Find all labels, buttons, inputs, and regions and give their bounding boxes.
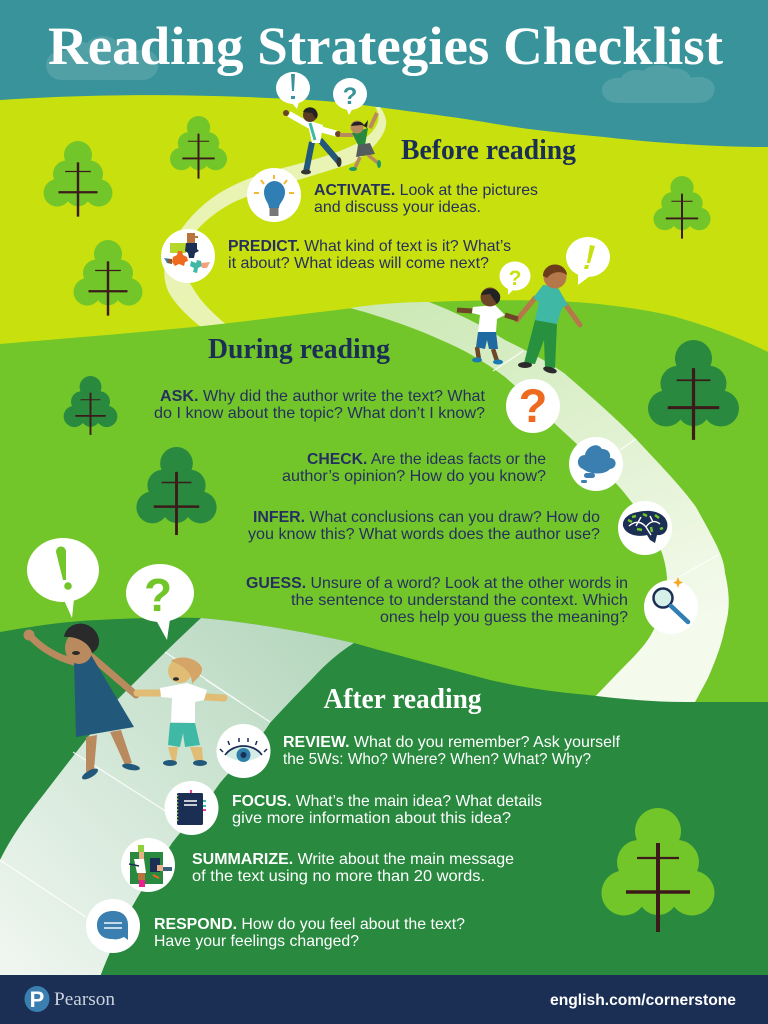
title: Reading Strategies Checklist	[48, 16, 723, 76]
trees	[44, 116, 739, 932]
path: during reading	[350, 302, 729, 704]
icon: magnifying glass	[644, 577, 698, 634]
icon: summary collage	[121, 838, 175, 892]
step: ask	[154, 379, 560, 433]
text: review: the 5Ws: Who? Where? When? What? Why?	[283, 751, 591, 768]
step: predict	[161, 229, 511, 283]
text: summarize: of the text using no more than 20 words.	[192, 868, 485, 885]
figures: boy and man holding hands: ?	[509, 267, 521, 290]
text: guess	[246, 575, 628, 626]
text: infer	[248, 509, 600, 543]
step: respond	[86, 899, 465, 953]
text: check: CHECK. Are the ideas facts or the	[307, 451, 546, 468]
step: check	[282, 437, 623, 491]
logo: pearson: P	[30, 987, 44, 1012]
icon: eye	[216, 724, 270, 778]
text: summarize	[192, 851, 514, 885]
mid green hill: during reading	[0, 300, 768, 760]
figures: woman and boy holding hands: ?	[144, 569, 172, 621]
text: focus: FOCUS. What’s the main idea? What details	[232, 793, 542, 810]
text: guess: the sentence to understand the context. Which	[291, 592, 628, 609]
step: infer	[248, 501, 672, 555]
heading: during reading: During reading	[208, 333, 390, 365]
path: after reading	[0, 618, 354, 977]
text: focus	[232, 793, 542, 827]
text: activate: and discuss your ideas.	[314, 199, 481, 216]
icon: puzzle pieces	[161, 229, 215, 283]
text: infer: INFER. What conclusions can you draw? How do	[253, 509, 600, 526]
heading: after reading: After reading	[324, 683, 482, 715]
icon: brain	[618, 501, 672, 555]
figures: man and girl walking: ?	[343, 83, 357, 110]
heading: before reading: Before reading	[401, 134, 576, 166]
figures: woman and boy holding hands	[24, 538, 224, 782]
icon: light bulb	[247, 168, 301, 222]
icon: notebook	[164, 781, 218, 835]
icon: speech bubble	[86, 899, 140, 953]
text: predict: it about? What ideas will come next?	[228, 255, 489, 272]
text: guess: ones help you guess the meaning?	[380, 609, 628, 626]
icon: question mark: ?	[519, 379, 547, 432]
text: respond: RESPOND. How do you feel about the text?	[154, 916, 465, 933]
text: review	[283, 734, 621, 768]
step: focus	[164, 781, 542, 835]
figures: boy and man holding hands	[457, 237, 610, 375]
dark green hill: after reading	[0, 618, 768, 980]
lime hill: before reading	[0, 95, 768, 400]
path: before reading	[164, 107, 386, 327]
step: guess	[246, 575, 698, 634]
clouds	[46, 36, 714, 103]
icon: question mark	[506, 379, 560, 433]
text: review: REVIEW. What do you remember? Ask yourself	[283, 734, 621, 751]
text: activate	[314, 182, 538, 216]
logo: pearson: Pearson	[54, 989, 116, 1010]
text: guess: GUESS. Unsure of a word? Look at the other words in	[246, 575, 628, 592]
text: focus: give more information about this idea?	[232, 810, 511, 827]
road dashes	[0, 351, 718, 917]
text: respond: Have your feelings changed?	[154, 933, 359, 950]
step: review	[216, 724, 621, 778]
text: summarize: SUMMARIZE. Write about the main message	[192, 851, 514, 868]
footer	[0, 975, 768, 1024]
text: ask	[154, 388, 486, 422]
text: predict	[228, 238, 511, 272]
text: ask: do I know about the topic? What don’t I know?	[154, 405, 485, 422]
logo: pearson	[24, 986, 116, 1012]
step: summarize	[121, 838, 514, 892]
text: check: author’s opinion? How do you know?	[282, 468, 546, 485]
icon: thought cloud	[569, 437, 623, 491]
text: ask: ASK. Why did the author write the text? What	[160, 388, 486, 405]
step: activate	[247, 168, 538, 222]
text: respond	[154, 916, 465, 950]
text: activate: ACTIVATE. Look at the pictures	[314, 182, 538, 199]
website url: english.com/cornerstone	[550, 992, 736, 1009]
text: check	[282, 451, 546, 485]
figures: man and girl walking	[276, 72, 381, 174]
text: predict: PREDICT. What kind of text is it? What’s	[228, 238, 511, 255]
text: infer: you know this? What words does the author use?	[248, 526, 600, 543]
